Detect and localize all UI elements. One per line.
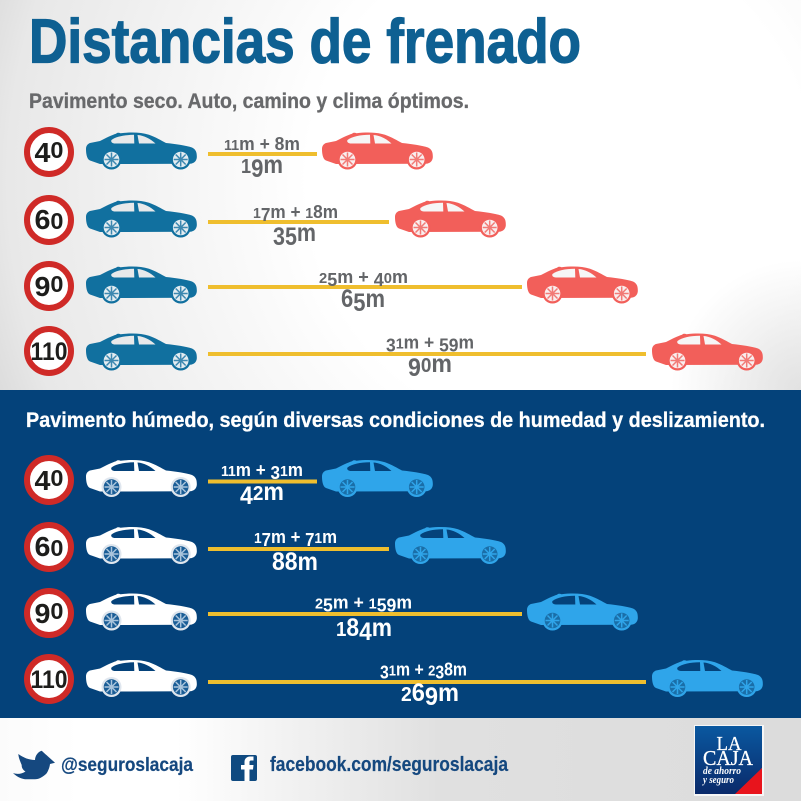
total distance: 1 — [241, 155, 251, 178]
speed sign 90 — [27, 591, 71, 635]
braking line — [208, 152, 317, 156]
braking line — [208, 547, 389, 551]
car: stop position — [395, 527, 506, 564]
speed sign 60: 60 — [34, 204, 64, 235]
total distance: m — [438, 679, 459, 707]
total distance: m — [263, 151, 283, 179]
distance breakdown: m — [392, 267, 408, 287]
distance breakdown: m — [458, 332, 474, 352]
distance breakdown: 2 — [319, 271, 327, 287]
braking line — [208, 612, 522, 616]
speed sign 40 — [27, 130, 71, 174]
car: stop position — [322, 460, 433, 497]
distance breakdown: 59 — [439, 336, 458, 356]
total distance: m — [297, 219, 316, 247]
distance breakdown: 59 — [377, 596, 396, 616]
distance breakdown: m — [453, 660, 469, 680]
distance breakdown: m — [288, 460, 304, 480]
logo: La Caja — [694, 725, 764, 796]
braking line — [208, 285, 522, 289]
logo: La Caja: y seguro — [701, 774, 734, 786]
car: start position — [86, 460, 197, 497]
distance breakdown: 1 — [253, 206, 261, 222]
car: stop position — [652, 333, 763, 370]
speed sign 110 — [27, 657, 71, 701]
car: start position — [86, 660, 197, 697]
car: start position — [86, 200, 197, 238]
speed sign 90: 9 — [34, 598, 50, 629]
braking line — [208, 480, 317, 484]
speed sign 40 — [27, 458, 71, 502]
car: start position — [86, 132, 197, 170]
braking line — [208, 680, 646, 684]
icon: facebook — [231, 755, 257, 781]
distance breakdown: m — [333, 592, 349, 612]
distance breakdown: m — [396, 592, 412, 612]
braking line — [208, 220, 389, 224]
total distance: 18 — [336, 614, 360, 642]
distance breakdown: 3 — [386, 336, 396, 356]
car: stop position — [527, 593, 638, 630]
speed sign 110: 110 — [30, 338, 68, 366]
car: start position — [86, 333, 197, 370]
speed sign 90 — [27, 264, 71, 308]
row: wet 110 km/h — [27, 657, 763, 711]
speed sign 90: 9 — [34, 271, 50, 302]
title: Distancias de frenado — [29, 8, 581, 76]
total distance: 0 — [421, 354, 431, 377]
distance breakdown: 8 — [444, 660, 453, 680]
logo: La Caja: LA — [716, 733, 742, 755]
distance breakdown: 4 — [374, 270, 384, 290]
total distance: 4 — [240, 482, 253, 510]
total distance: m — [431, 350, 454, 378]
total distance: 5 — [353, 289, 366, 317]
row: wet 40 km/h — [27, 458, 433, 510]
row: dry 40 km/h — [27, 130, 433, 183]
distance breakdown: 1 — [254, 531, 262, 547]
distance breakdown: 1 — [389, 664, 396, 680]
total distance: 26 — [401, 679, 426, 707]
speed sign 40: 0 — [50, 137, 64, 163]
distance breakdown: 3 — [435, 662, 444, 682]
distance breakdown: 7 — [262, 530, 271, 550]
panel: footer background — [0, 718, 801, 801]
total distance: 9 — [408, 354, 421, 382]
facebook address: facebook.com/seguroslacaja — [270, 754, 509, 776]
distance breakdown: m — [270, 202, 286, 222]
distance breakdown: 1 — [396, 336, 404, 352]
distance breakdown: + 1 — [354, 592, 377, 612]
speed sign 90: 0 — [50, 271, 64, 297]
distance breakdown: 11m + 8m — [224, 134, 300, 154]
distance breakdown: m — [337, 267, 353, 287]
speed sign 90: 0 — [50, 598, 64, 624]
total distance: 35 — [273, 223, 297, 251]
heading: wet pavement: Pavimento húmedo, según diversas condiciones de humedad y deslizamiento. — [26, 409, 765, 432]
distance breakdown: 3 — [270, 463, 280, 483]
twitter handle: @seguroslacaja — [61, 755, 193, 776]
car: start position — [86, 527, 197, 564]
total distance: m — [365, 285, 385, 313]
distance breakdown: 11m + — [221, 460, 267, 480]
distance breakdown: m — [322, 527, 338, 547]
total distance: 4 — [359, 618, 372, 646]
braking line — [208, 352, 646, 356]
panel: wet pavement background — [0, 390, 801, 718]
distance breakdown: m + — [404, 332, 435, 352]
speed sign 40: 4 — [34, 137, 51, 168]
distance breakdown: 7 — [261, 205, 270, 225]
total distance: m — [372, 614, 392, 642]
distance breakdown: + 18m — [291, 202, 339, 222]
distance breakdown: 1 — [280, 464, 288, 480]
logo: La Caja: de ahorro — [703, 765, 741, 777]
speed sign 60: 60 — [34, 531, 64, 562]
subtitle: dry pavement: Pavimento seco. Auto, camino y clima óptimos. — [29, 90, 469, 113]
distance breakdown: 1 — [314, 531, 322, 547]
car: start position — [86, 593, 197, 630]
speed sign 110: 110 — [30, 666, 68, 694]
car: start position — [86, 266, 197, 304]
icon: twitter bird — [13, 751, 55, 779]
speed sign 60 — [27, 198, 71, 242]
distance breakdown: m + 2 — [396, 660, 436, 680]
distance breakdown: 2 — [315, 596, 323, 612]
distance breakdown: 7 — [305, 530, 314, 550]
total distance: 88m — [272, 548, 318, 576]
car: stop position — [395, 200, 506, 238]
total distance: m — [263, 478, 286, 506]
speed sign 40: 0 — [50, 465, 64, 491]
distance breakdown: 3 — [380, 662, 389, 682]
distance breakdown: + — [291, 527, 301, 547]
speed sign 110 — [27, 329, 71, 373]
speed sign 40: 4 — [34, 465, 51, 496]
row: wet 60 km/h — [27, 525, 506, 576]
row: dry 110 km/h — [27, 329, 763, 382]
total distance: 9 — [251, 155, 263, 183]
car: stop position — [652, 660, 763, 697]
row: dry 60 km/h — [27, 198, 506, 251]
distance breakdown: 5 — [323, 596, 333, 616]
row: wet 90 km/h — [27, 591, 638, 646]
total distance: 9 — [425, 683, 438, 711]
distance breakdown: 0 — [384, 271, 392, 287]
total distance: 6 — [341, 285, 355, 313]
distance breakdown: 5 — [327, 270, 337, 290]
row: dry 90 km/h — [27, 264, 638, 317]
logo: La Caja: CAJA — [703, 746, 754, 770]
panel: dry pavement background — [0, 0, 801, 390]
car: stop position — [527, 266, 638, 304]
speed sign 60 — [27, 525, 71, 569]
total distance: 2 — [253, 482, 263, 505]
car: stop position — [322, 132, 433, 170]
distance breakdown: + — [358, 267, 369, 287]
distance breakdown: m — [271, 527, 286, 547]
